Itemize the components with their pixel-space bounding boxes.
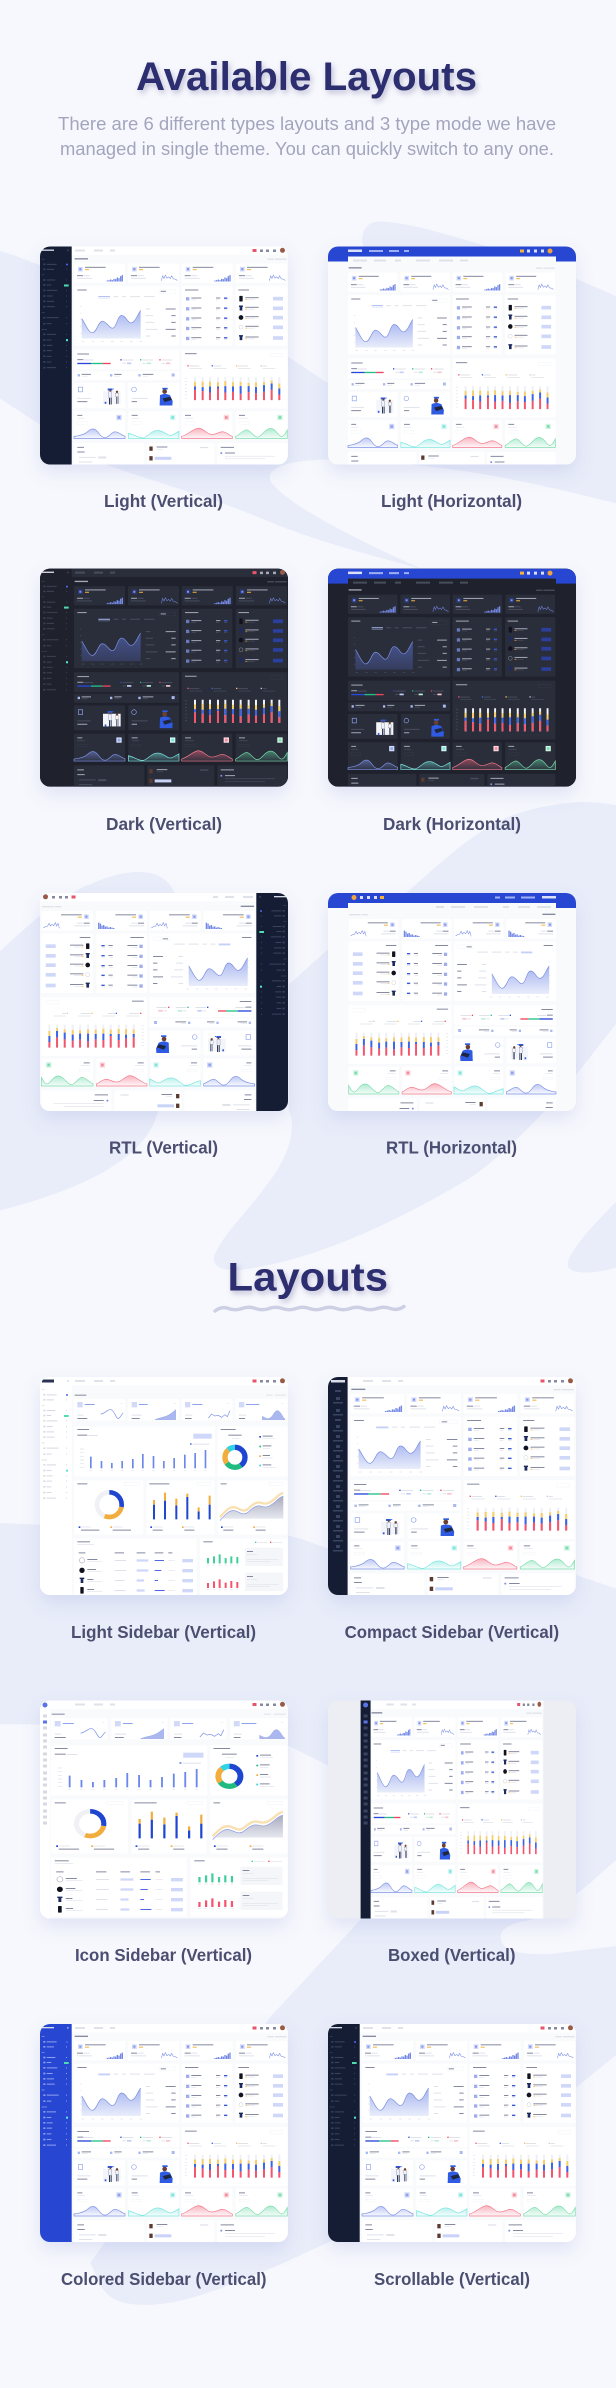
label: Colored Sidebar (Vertical): Colored Sidebar (Vertical) [61,2269,266,2289]
wave underline [215,1306,404,1311]
thumbnail: Light Sidebar (Vertical) [40,1377,288,1597]
thumbnail: Boxed (Vertical) [328,1700,576,1922]
thumbnail: Scrollable (Vertical) [328,2024,576,2245]
thumbnail: Dark (Vertical) [40,569,288,790]
thumbnail: Compact Sidebar (Vertical) [328,1377,576,1598]
thumbnail: Colored Sidebar (Vertical) [40,2024,288,2245]
label: RTL (Horizontal): RTL (Horizontal) [386,1138,517,1158]
label: Scrollable (Vertical): Scrollable (Vertical) [374,2269,530,2289]
label: Light (Vertical): Light (Vertical) [104,491,223,511]
label: RTL (Vertical): RTL (Vertical) [109,1138,218,1158]
title: Layouts: Layouts [228,1256,388,1300]
intro text: There are 6 different types layouts and 3 type mode we have [58,113,556,134]
label: Boxed (Vertical): Boxed (Vertical) [388,1945,516,1965]
thumbnail: RTL (Vertical) [40,893,288,1115]
title: Available Layouts: Available Layouts [136,55,477,99]
label: Light Sidebar (Vertical): Light Sidebar (Vertical) [71,1622,256,1642]
label: Light (Horizontal): Light (Horizontal) [381,491,522,511]
intro text: managed in single theme. You can quickly switch to any one. [60,138,554,159]
thumbnail: Dark (Horizontal) [328,569,576,799]
intro text [58,113,556,159]
label: Compact Sidebar (Vertical): Compact Sidebar (Vertical) [345,1622,559,1642]
thumbnail: Light (Horizontal) [328,246,576,477]
thumbnail: Light (Vertical) [40,246,288,468]
background blob: upper band [0,222,616,569]
label: Dark (Horizontal): Dark (Horizontal) [383,814,521,834]
background blob: lower band [0,1523,616,2305]
background blobs: middle band [0,802,616,1273]
label: Dark (Vertical): Dark (Vertical) [106,814,222,834]
label: Icon Sidebar (Vertical): Icon Sidebar (Vertical) [75,1945,252,1965]
thumbnail: RTL (Horizontal) [328,893,576,1123]
thumbnail: Icon Sidebar (Vertical) [40,1700,288,1918]
